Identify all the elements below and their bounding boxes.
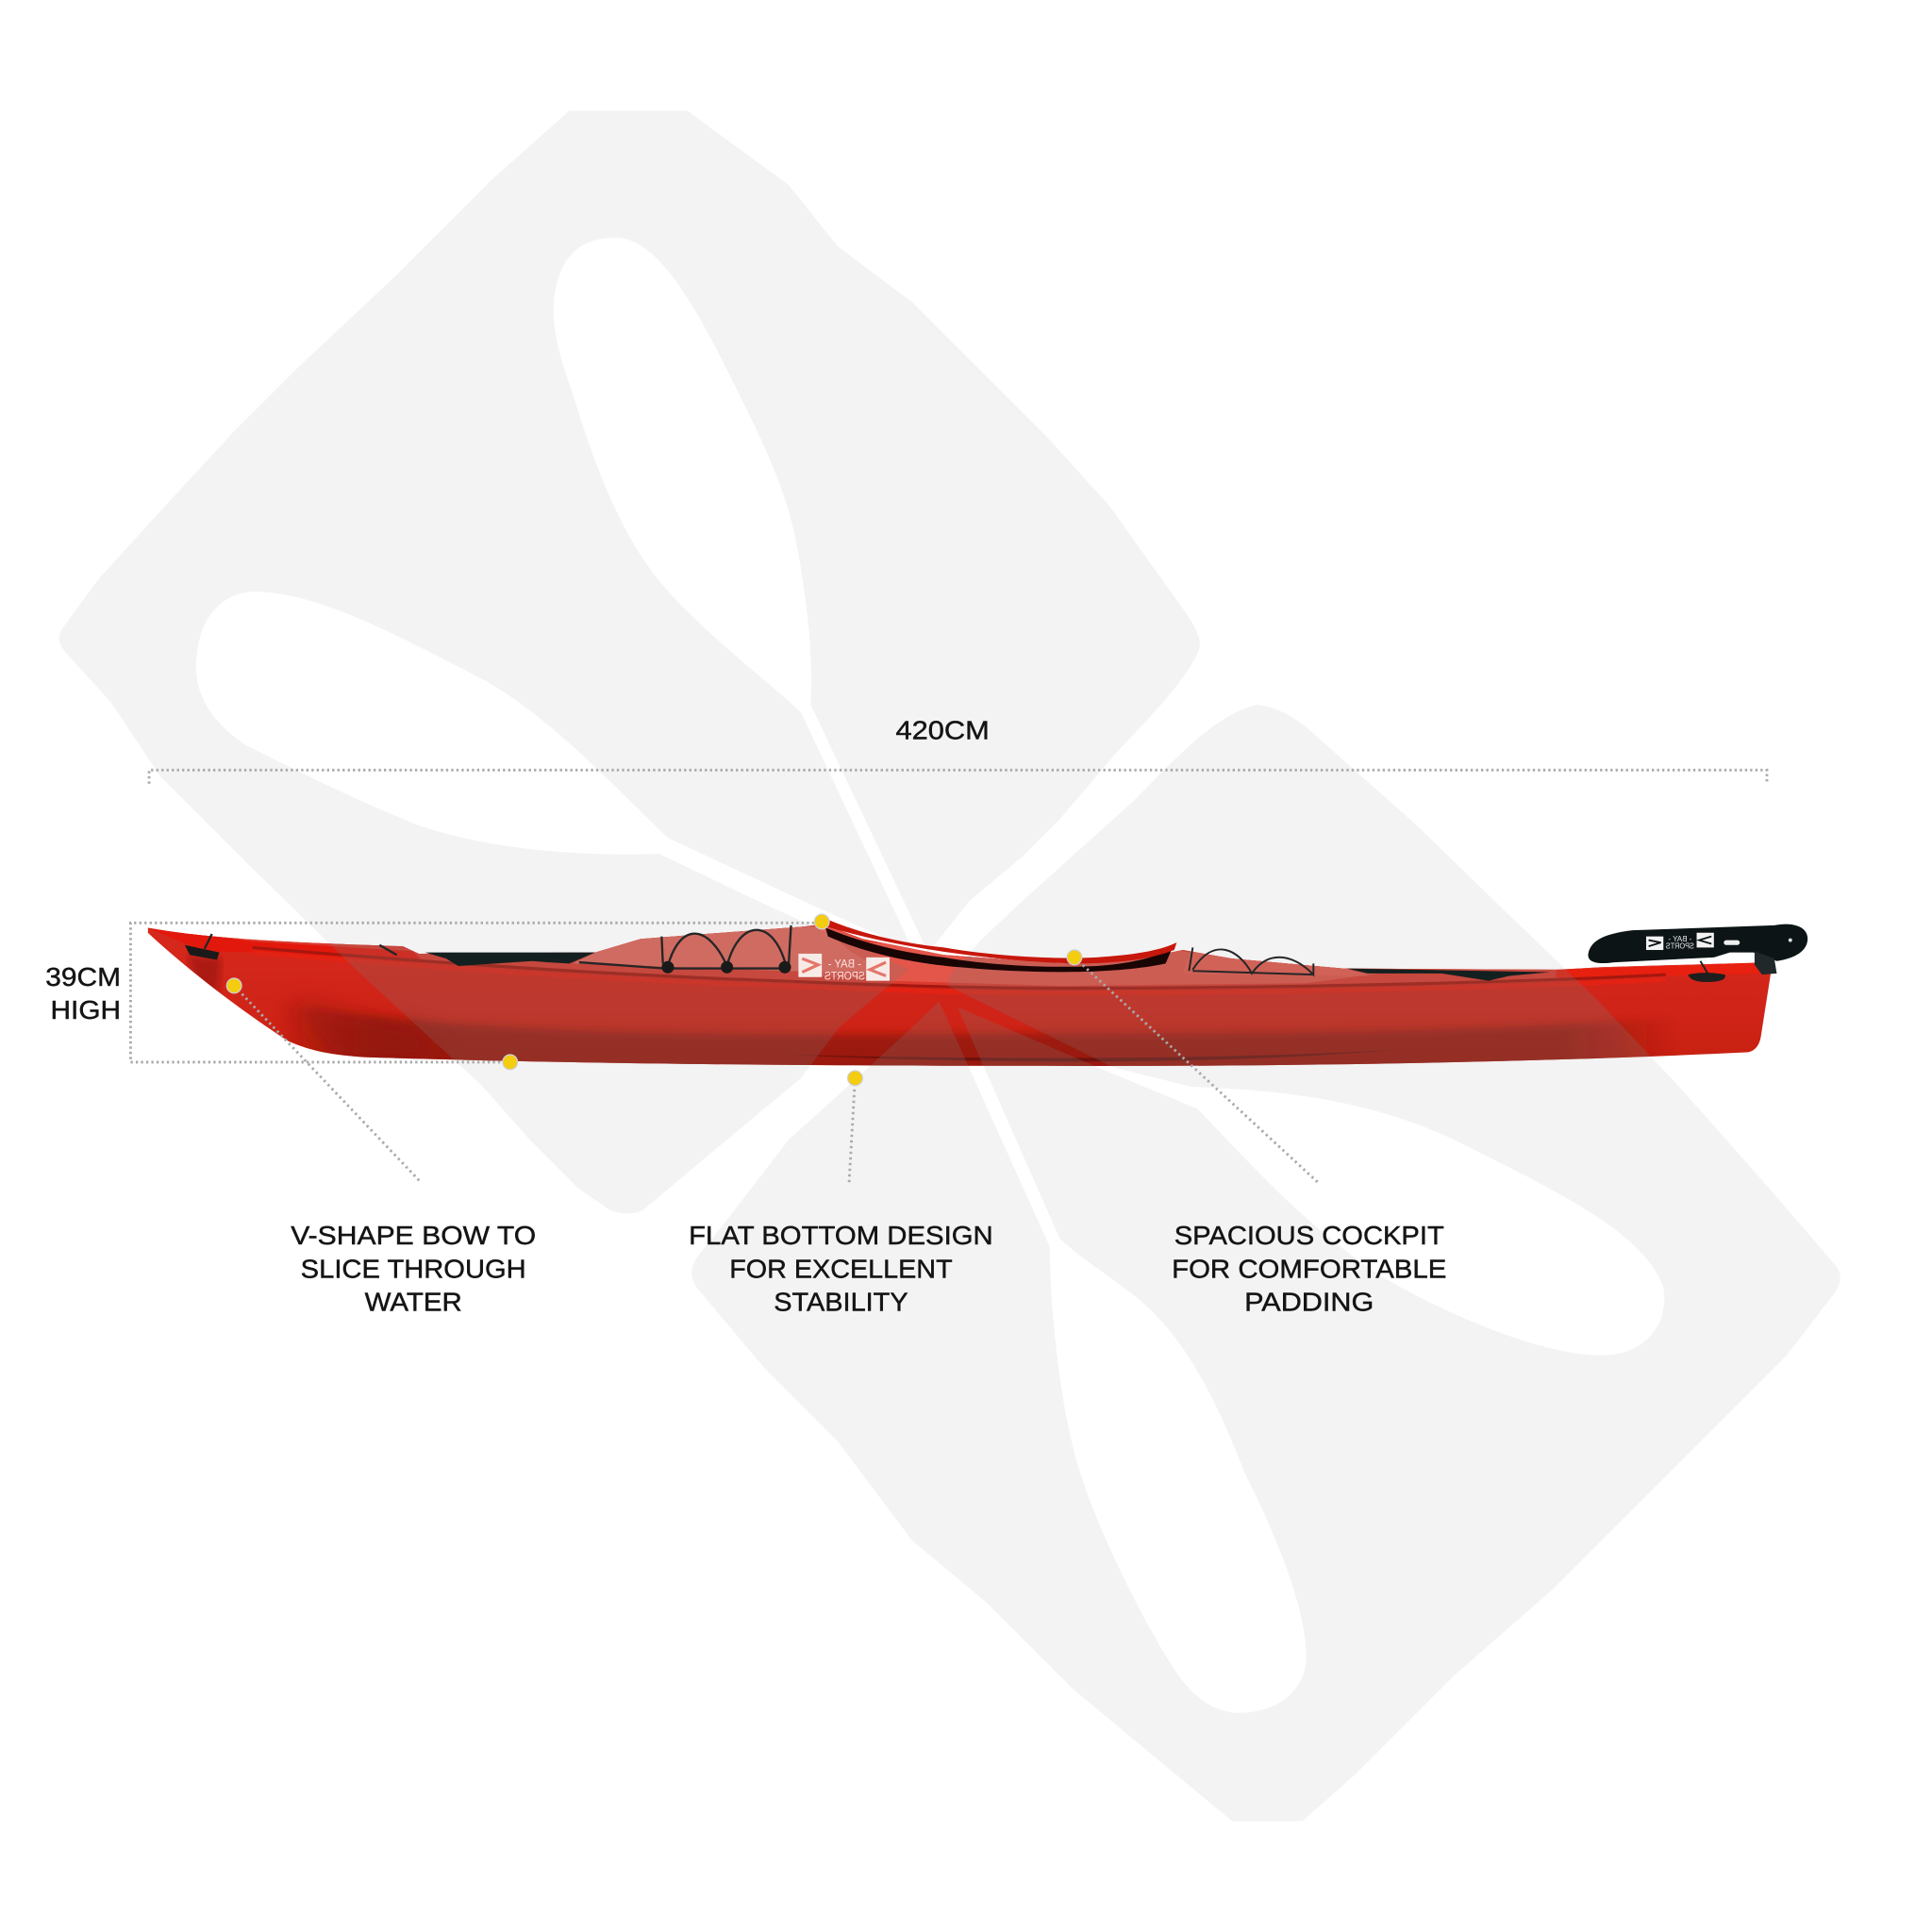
handle shadow at bow [188,955,222,998]
kayak hull [147,924,1771,1066]
leader: flat bottom [849,1078,855,1185]
callout: v-shape bow: V-SHAPE BOW TO [291,1221,536,1250]
deck surface [189,924,1731,987]
rear raised hatch [1183,950,1368,975]
length dimension line [149,770,1767,784]
length label: 420CM [896,716,990,745]
callout: cockpit: SPACIOUS COCKPIT [1174,1221,1444,1250]
leader: bow [234,986,422,1183]
height label: HIGH [51,995,121,1024]
height label: 39CM [45,962,121,991]
callout: flat bottom: STABILITY [774,1288,908,1317]
gunwale line [253,953,1666,993]
rudder: SPORTS [1666,942,1694,951]
hull lower keel band [292,1008,1658,1066]
height label [45,962,121,1024]
rudder: - BAY - [1668,935,1691,943]
height dimension box [130,923,820,1062]
callout: cockpit [1172,1221,1446,1317]
cockpit rim [825,919,1176,972]
callout: flat bottom [689,1221,993,1317]
stern handle [1688,961,1725,982]
bow shading [290,1001,443,1059]
forward raised hatch [573,926,887,974]
deck highlight under cockpit [813,924,1380,986]
callout: flat bottom: FOR EXCELLENT [729,1254,953,1283]
stern deck strip [1557,962,1761,978]
deck logo [798,954,890,982]
callout: v-shape bow: WATER [365,1288,462,1317]
kayak [147,921,1807,1066]
leader: cockpit [1074,958,1319,1183]
rear bungee cords [1189,947,1313,974]
marker dots [226,914,1082,1086]
front bungee cords [205,925,791,969]
emblem shading on hull [329,925,1651,1066]
bow handle [185,945,219,959]
keel shadow stroke [789,1050,1392,1061]
callout: flat bottom: FLAT BOTTOM DESIGN [689,1221,993,1250]
callout: cockpit: PADDING [1244,1288,1374,1317]
bow deck strip [148,928,425,963]
deck logo: SPORTS [824,970,865,982]
rear deck net [1347,969,1550,981]
callout: cockpit: FOR COMFORTABLE [1172,1254,1446,1283]
rudder [1588,924,1807,974]
front deck net [425,953,595,966]
deck logo: - BAY - [828,958,861,970]
callout: v-shape bow: SLICE THROUGH [301,1254,526,1283]
callout: v-shape bow [291,1221,536,1317]
front bungee anchors [661,961,791,974]
